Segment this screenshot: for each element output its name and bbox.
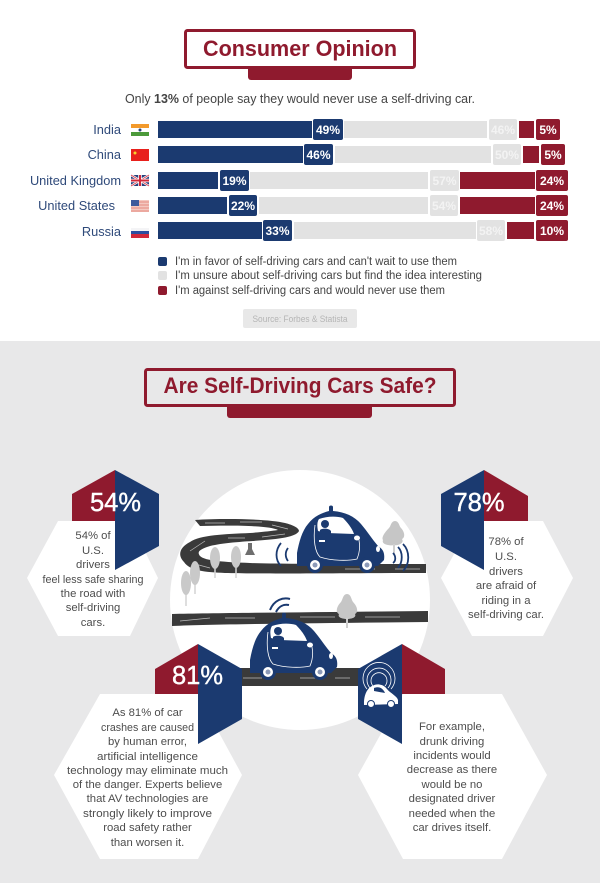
row: China: China: [88, 147, 122, 162]
callout: drunk driving: needed when the: [409, 808, 495, 820]
callout: drunk driving: designated driver: [409, 793, 496, 805]
icon: connected car: [363, 662, 398, 708]
callout: 81%: by human error,: [108, 736, 187, 748]
callout: 81%: [54, 644, 242, 859]
signal waves: lower car: [270, 598, 290, 612]
legend: I'm in favor of self-driving cars and can't wait to use them: [175, 256, 457, 268]
row: United States: [38, 195, 568, 216]
row: United States: 24%: [540, 199, 564, 213]
callout: 54%: 54% of: [75, 530, 111, 542]
callout: 54%: 54%: [90, 489, 141, 517]
stacked bar chart: [30, 119, 568, 241]
row: United States: 22%: [231, 199, 255, 213]
row: United Kingdom: [30, 170, 568, 191]
legend: I'm against self-driving cars and would never use them: [175, 285, 445, 297]
callout: 81%: strongly likely to improve: [83, 808, 212, 820]
straight road: [172, 611, 428, 626]
callout: drunk driving: decrease as there: [407, 764, 497, 776]
row: Russia: Russia: [82, 224, 122, 239]
trees: [181, 543, 255, 606]
callout: 81%: of the danger. Experts believe: [73, 779, 222, 791]
callout: 78%: U.S.: [495, 551, 517, 563]
tree on straight road: [337, 594, 357, 628]
callout: 78%: drivers: [489, 566, 523, 578]
callout: 54%: the road with: [61, 588, 125, 600]
section background: safety: [0, 341, 600, 883]
lower road: [232, 668, 362, 686]
row: India: 46%: [491, 123, 515, 137]
row: United Kingdom: 24%: [540, 174, 564, 188]
callout: drunk driving: car drives itself.: [413, 822, 491, 834]
callout: 54%: cars.: [81, 617, 105, 629]
row: China: 46%: [306, 148, 331, 162]
callout: 81%: As 81% of car: [112, 707, 183, 719]
callout: 81%: artificial intelligence: [97, 751, 198, 763]
callout: drunk driving: incidents would: [413, 750, 491, 762]
row: India: India: [93, 122, 122, 137]
callout: drunk driving: would be no: [421, 779, 482, 791]
row: India: 5%: [539, 123, 557, 137]
callout: 54%: feel less safe sharing: [42, 574, 144, 586]
row: China: [88, 144, 565, 165]
row: China: 5%: [544, 148, 562, 162]
callout: 54%: [27, 470, 159, 636]
signal waves: upper car: [276, 543, 408, 571]
row: Russia: 58%: [479, 224, 503, 238]
legend: I'm unsure about self-driving cars but find the idea interesting: [175, 270, 482, 282]
row: United States: 54%: [432, 199, 456, 213]
row: India: 49%: [316, 123, 340, 137]
row: Russia: 10%: [540, 224, 564, 238]
callout: 54%: self-driving: [66, 602, 120, 614]
callout: 78%: are afraid of: [476, 580, 537, 592]
callout: 81%: 81%: [172, 662, 223, 690]
row: India: [93, 119, 560, 140]
callout: drunk driving: drunk driving: [420, 736, 484, 748]
car: lower: [250, 612, 337, 680]
heading: Consumer Opinion: Consumer Opinion: [203, 36, 397, 61]
callout: 81%: road safety rather: [103, 822, 192, 834]
callout: 81%: crashes are caused: [101, 722, 194, 734]
source note: Source: Forbes & Statista: [252, 314, 348, 324]
callout: 81%: than worsen it.: [111, 837, 184, 849]
callout: 54%: U.S.: [82, 545, 104, 557]
heading: Consumer Opinion: [186, 30, 414, 80]
callout: 54%: drivers: [76, 559, 110, 571]
heading: Are Self-Driving Cars Safe?: [146, 370, 454, 418]
car: upper: [297, 506, 384, 573]
callout: 81%: that AV technologies are: [87, 793, 208, 805]
callout: 78%: 78% of: [488, 536, 524, 548]
intro text: Only 13% of people say they would never use a self-driving car.: [125, 92, 475, 106]
callout: 81%: technology may eliminate much: [67, 765, 228, 777]
callout: 78%: 78%: [453, 489, 505, 517]
callout: drunk driving: [358, 644, 547, 859]
callout: 78%: riding in a: [482, 595, 531, 607]
legend: [158, 256, 482, 297]
row: Russia: [82, 220, 568, 241]
callout: drunk driving: For example,: [419, 721, 485, 733]
callout: 78%: self-driving car.: [468, 609, 544, 621]
callout: 78%: [441, 470, 573, 636]
row: United Kingdom: United Kingdom: [30, 173, 121, 188]
tree behind upper car: [383, 521, 404, 554]
row: Russia: 33%: [265, 224, 290, 238]
winding road: [180, 519, 426, 573]
heading: Are Self-Driving Cars Safe?: Are Self-Driving Cars Safe?: [164, 373, 436, 398]
illustration: roads and self-driving cars: [170, 470, 430, 730]
row: United Kingdom: 57%: [432, 174, 457, 188]
row: United Kingdom: 19%: [222, 174, 247, 188]
source note: [243, 309, 357, 328]
row: United States: United States: [38, 198, 115, 213]
row: China: 50%: [495, 148, 519, 162]
